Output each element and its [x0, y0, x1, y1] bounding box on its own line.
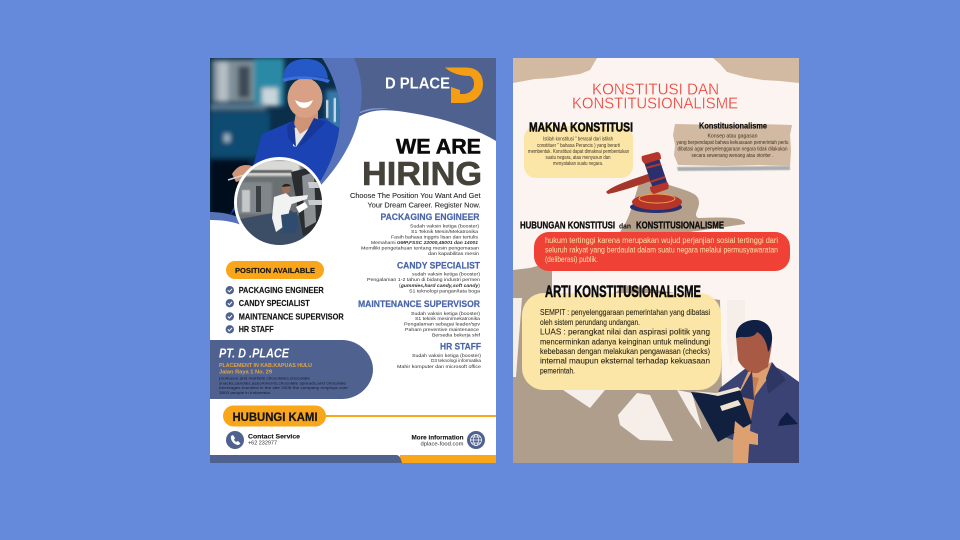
panel: arti konstitusionalisme: kebebasan dengan melakukan pengawasan (checks) [540, 346, 710, 356]
job: packaging engineer: Sudah vaksin ketiga (booster) [410, 224, 479, 230]
logo [385, 68, 483, 103]
panel: makna konstitusi: membentuk. Konstitusi dapat dimaknai pembentukan [528, 149, 629, 155]
heading: hubungan: KONSTITUSIONALISME [636, 220, 724, 232]
hand [232, 165, 252, 182]
panel: konstitusionalisme: yang berpendapat bahwa kekuasaan pemerintah perlu [676, 140, 789, 146]
panel: makna konstitusi: menyatakan suatu negara. [553, 161, 603, 167]
job: packaging engineer: S1 Teknik Mesin/Mekatronika [411, 229, 478, 235]
heading: hubungan: HUBUNGAN KONSTITUSI [520, 220, 615, 232]
circle photo: technician [234, 157, 326, 250]
panel: makna konstitusi: constituer " bahasa Perancis ) yang berarti [537, 143, 620, 149]
contact service: Contact Service [248, 434, 300, 440]
man hand [734, 421, 758, 445]
heading: we are hiring [362, 136, 482, 192]
company panel: produces and markets chocolates,chocolate [219, 376, 310, 380]
hubungi kami pill: HUBUNGI KAMI [232, 410, 318, 424]
more information: More information [412, 434, 464, 442]
position list [226, 286, 344, 334]
panel: konstitusionalisme [673, 122, 792, 171]
photo rim [210, 58, 362, 238]
gavel block [630, 204, 682, 213]
contact service [226, 431, 300, 449]
panel: arti konstitusionalisme: oleh sistem perundang undangan. [540, 317, 640, 327]
job: candy specialist: Pengalaman 1-2 tahun di bidang industri permen [367, 277, 480, 283]
heading: hubungan: dan [619, 224, 631, 230]
job: candy specialist: CANDY SPECIALIST [397, 260, 480, 272]
panel: arti konstitusionalisme: mencerminkan adanya keinginan untuk melindungi [540, 336, 710, 346]
heading: we are hiring: HIRING [362, 155, 482, 192]
subheading: Choose The Position You Want And Get [350, 191, 481, 200]
company panel: 3500 people in Indonesia. [219, 391, 271, 395]
panel: arti konstitusionalisme: pemerintah. [540, 366, 575, 376]
photo: worker [210, 58, 340, 216]
company panel: snacks,candies,assortments,chocolate spreads,and chocolate [219, 381, 346, 385]
job: maintenance supervisor: Sudah vaksin ketiga (booster) [411, 311, 480, 317]
company panel: Jalan Raya 1 No. 29 [219, 370, 272, 376]
job: candy specialist [367, 260, 480, 294]
job: hr staff: Sudah vaksin ketiga (booster) [412, 353, 481, 359]
job: maintenance supervisor [358, 299, 481, 338]
worker body [230, 118, 345, 215]
item: hr staff: HR STAFF [239, 325, 274, 334]
company panel: beverages.founded in the late 2005 the company employs over [219, 386, 349, 390]
panel: konstitusionalisme: secara sewenang wenang atau otoriter . [692, 153, 774, 159]
job: candy specialist: S1 teknologi pangan/tata boga [409, 288, 480, 294]
panel: arti konstitusionalisme: ARTI KONSTITUSIONALISME [545, 283, 701, 301]
paper shards [513, 298, 702, 441]
icon: D mark [445, 68, 483, 103]
gavel head [644, 160, 668, 186]
poster: konstitusi [513, 58, 799, 463]
job: hr staff: Mahir komputer dan microsoft office [397, 364, 481, 370]
panel: hubungan: hukum tertinggi karena merupakan wujud perjanjian sosial tertinggi dari [545, 236, 778, 245]
panel: hubungan: (deliberasi) publik. [545, 255, 598, 264]
job: packaging engineer: Memahami GMP,FSSC 22000,45001 dan 14001 [371, 240, 478, 246]
panel: arti konstitusionalisme [522, 283, 721, 390]
job: maintenance supervisor: Paham preventive maintenance [405, 327, 479, 333]
illustration: man reading [691, 320, 799, 463]
job: maintenance supervisor: Pengalaman sebagai leader/spv [404, 322, 481, 328]
hard hat [284, 59, 328, 79]
icon: globe [467, 431, 485, 449]
man lapel [738, 362, 786, 400]
panel: konstitusionalisme: Konsep atau gagasan [708, 134, 758, 140]
man body [706, 365, 799, 463]
worker head [288, 78, 322, 118]
job: maintenance supervisor: MAINTENANCE SUPERVISOR [358, 299, 480, 310]
job: packaging engineer: dan kapabilitas mesin [428, 251, 479, 257]
position available pill [226, 261, 324, 279]
man shirt and tie [733, 362, 772, 463]
job: maintenance supervisor: Bersedia bekerja shif [432, 332, 481, 338]
subheading: Your Dream Career. Register Now. [368, 200, 480, 210]
more information [412, 431, 485, 449]
panel: arti konstitusionalisme: internal maupun eksternal terhadap kekuasaan [540, 356, 710, 366]
subheading [350, 191, 481, 210]
gavel handle [606, 174, 651, 194]
item: maintenance supervisor: MAINTENANCE SUPERVISOR [239, 312, 344, 321]
company panel: PLACEMENT IN KAB.KAPUAS HULU [219, 363, 312, 369]
job: candy specialist: (gummies,hard candy,soft candy ) [399, 283, 480, 289]
hubungi kami pill [223, 406, 496, 426]
job: packaging engineer [361, 212, 480, 257]
more information: dplace-food.com [420, 442, 464, 448]
job: hr staff: D3 teknologi informatika [431, 358, 481, 364]
torn paper corners [513, 58, 799, 83]
panel: makna konstitusi: MAKNA KONSTITUSI [529, 120, 633, 134]
job: packaging engineer: PACKAGING ENGINEER [380, 212, 480, 223]
panel: konstitusionalisme: dibatasi agar penyelenggaraan negara tidak dilakukan [678, 146, 788, 152]
item: candy specialist: CANDY SPECIALIST [239, 299, 310, 308]
panel: hubungan [534, 232, 790, 271]
heading: hubungan [520, 221, 724, 229]
title [573, 84, 738, 108]
poster: hiring [210, 58, 496, 463]
open book [691, 390, 752, 442]
panel: arti konstitusionalisme: LUAS : perangkat nilai dan aspirasi politik yang [540, 326, 710, 336]
position available pill: POSITION AVAILABLE [235, 266, 315, 275]
job: hr staff [397, 342, 481, 370]
job: packaging engineer: Fasih bahasa inggris lisan dan tertulis [391, 234, 479, 240]
panel: arti konstitusionalisme: SEMPIT : penyelenggaraan pemerintahan yang dibatasi [540, 307, 710, 317]
bottom strip [210, 455, 496, 463]
icon: gavel [606, 152, 682, 213]
job: packaging engineer: Memiliki pengetahuan tentang mesin pengemasan [361, 246, 479, 252]
man head [736, 320, 772, 373]
contact service: +62 232977 [248, 440, 277, 446]
heading: we are hiring: WE ARE [396, 136, 481, 158]
title: KONSTITUSIONALISME [572, 96, 738, 112]
icon: phone [226, 431, 244, 449]
background shape [513, 266, 733, 463]
item: packaging engineer: PACKAGING ENGINEER [239, 286, 324, 295]
title: KONSTITUSI DAN [592, 82, 719, 98]
panel: makna konstitusi: suatu negara, atau menyusun dan [546, 155, 611, 161]
job: hr staff: HR STAFF [440, 342, 481, 352]
right pipes [327, 98, 335, 122]
logo: D PLACE [385, 76, 450, 92]
company panel [210, 340, 373, 399]
panel: makna konstitusi [524, 120, 633, 178]
job: maintenance supervisor: S1 teknik mesin/mekatronika [415, 316, 480, 322]
header band [335, 58, 496, 150]
job: candy specialist: sudah vaksin ketiga (booster) [412, 272, 480, 278]
panel: konstitusionalisme: Konstitusionalisme [699, 122, 768, 130]
company panel: PT. D .PLACE [219, 346, 290, 360]
panel: hubungan: seluruh rakyat yang berdaulat dalam suatu negara melalui permusyawaratan [545, 246, 778, 254]
panel: makna konstitusi: Istilah konstitusi " berasal dari istilah [543, 136, 613, 142]
